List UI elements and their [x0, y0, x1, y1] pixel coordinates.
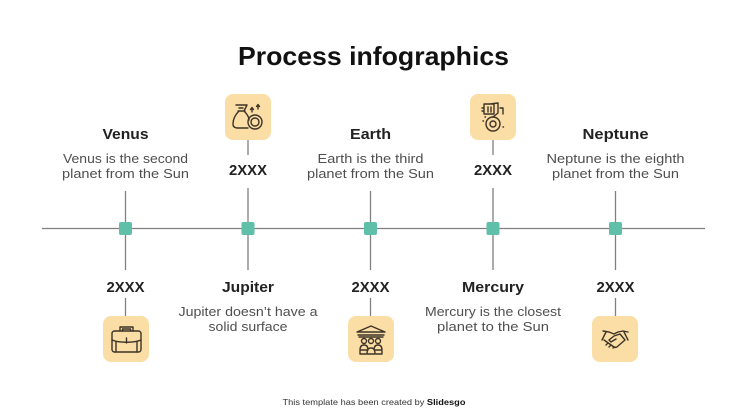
step: Venus: Venus: [102, 126, 148, 143]
step: Mercury: Mercury is the closest: [425, 304, 561, 319]
step: Venus: Venus is the second: [63, 151, 188, 166]
step: Neptune: Neptune is the eighth: [546, 151, 684, 166]
step: Earth: [307, 126, 434, 362]
step: Mercury: 2XXX: [474, 162, 512, 179]
step: Neptune: planet from the Sun: [552, 166, 679, 181]
step: Earth: planet from the Sun: [307, 166, 434, 181]
step: Jupiter: Jupiter doesn’t have a: [178, 304, 318, 319]
step: Earth: 2XXX: [352, 279, 390, 296]
step: Neptune: 2XXX: [596, 279, 634, 296]
step: Mercury: [425, 94, 561, 334]
step: Earth: Earth: [350, 126, 391, 143]
step: Jupiter: [178, 94, 318, 334]
step: Venus: 2XXX: [106, 279, 144, 296]
step: Venus: [62, 126, 189, 362]
step: Jupiter: Jupiter: [222, 279, 274, 296]
step: Neptune: [546, 126, 684, 362]
step: Mercury: Mercury: [462, 279, 525, 296]
step: Mercury: planet to the Sun: [437, 319, 549, 334]
step: Neptune: Neptune: [582, 126, 648, 143]
footer credit: This template has been created by Slidesgo: [282, 397, 465, 407]
step: Earth: Earth is the third: [318, 151, 424, 166]
title: Process infographics: [238, 41, 509, 71]
step: Jupiter: solid surface: [208, 319, 288, 334]
step: Venus: planet from the Sun: [62, 166, 189, 181]
timeline axis: [42, 228, 705, 230]
step: Jupiter: 2XXX: [229, 162, 267, 179]
